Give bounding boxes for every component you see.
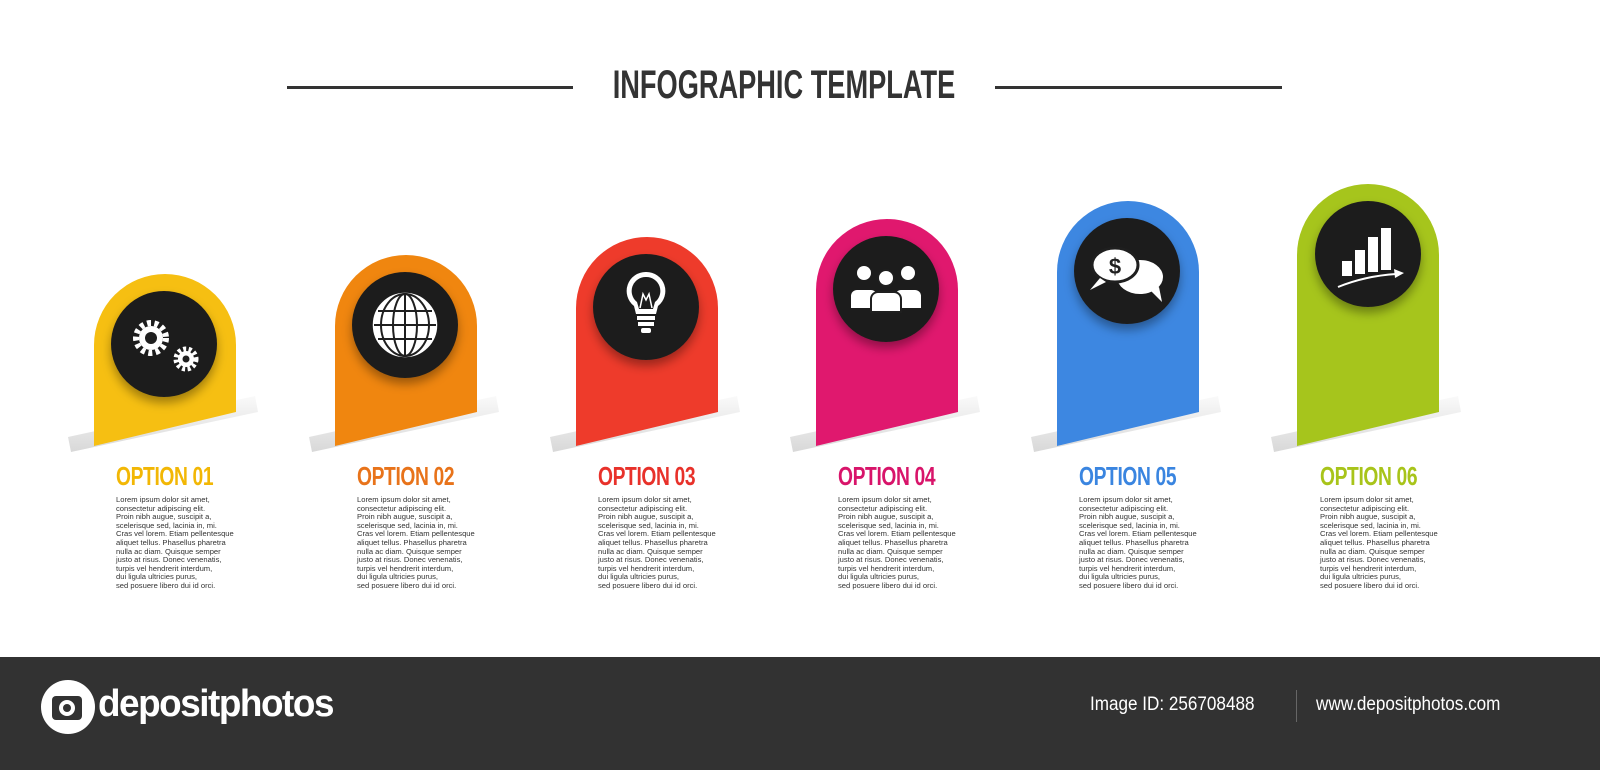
option 02 text: Cras vel lorem. Etiam pellentesque [357,529,475,538]
option 05 text: scelerisque sed, lacinia in, mi. [1079,521,1180,530]
option 05 text: Proin nibh augue, suscipit a, [1079,512,1174,521]
option 06 text: OPTION 06 [1320,461,1417,491]
option 04 text: sed posuere libero dui id orci. [838,581,937,590]
option 03 text: aliquet tellus. Phasellus pharetra [598,538,708,547]
option 03 text: sed posuere libero dui id orci. [598,581,697,590]
option 06 text: Cras vel lorem. Etiam pellentesque [1320,529,1438,538]
option 04 text [838,461,956,590]
option 03 text: scelerisque sed, lacinia in, mi. [598,521,699,530]
option 02 text: sed posuere libero dui id orci. [357,581,456,590]
option 01 text: Cras vel lorem. Etiam pellentesque [116,529,234,538]
option 05 text: OPTION 05 [1079,461,1176,491]
option 02 text: OPTION 02 [357,461,454,491]
option 03 text: Proin nibh augue, suscipit a, [598,512,693,521]
option 05 text: Lorem ipsum dolor sit amet, [1079,495,1173,504]
option 05 text: Cras vel lorem. Etiam pellentesque [1079,529,1197,538]
option 04 text: OPTION 04 [838,461,935,491]
option 06 text: sed posuere libero dui id orci. [1320,581,1419,590]
option 05 text [1078,461,1197,590]
footer logo [41,680,333,734]
option 06 text: Proin nibh augue, suscipit a, [1320,512,1415,521]
option 04 text: justo at risus. Donec venenatis, [838,555,944,564]
option 03 text [598,461,716,590]
option 03 text: turpis vel hendrerit interdum, [598,564,694,573]
option 02 text: turpis vel hendrerit interdum, [357,564,453,573]
option 06 text: turpis vel hendrerit interdum, [1320,564,1416,573]
option 01 text [116,461,234,590]
title: INFOGRAPHIC TEMPLATE [613,63,955,107]
option 06 text: consectetur adipiscing elit. [1320,504,1409,513]
option 03 text: OPTION 03 [598,461,695,491]
icon: people [851,266,921,312]
option 04 text: Lorem ipsum dolor sit amet, [838,495,932,504]
tab: option 03 [550,237,740,452]
footer url: www.depositphotos.com [1316,694,1500,715]
option 01 text: aliquet tellus. Phasellus pharetra [116,538,226,547]
option 05 text: sed posuere libero dui id orci. [1079,581,1178,590]
option 01 text: consectetur adipiscing elit. [116,504,205,513]
option 03 text: Lorem ipsum dolor sit amet, [598,495,692,504]
option 01 text: turpis vel hendrerit interdum, [116,564,212,573]
option 02 text: dui ligula ultricies purus, [357,572,438,581]
option 06 text: Lorem ipsum dolor sit amet, [1320,495,1414,504]
footer bar [0,657,1600,770]
option 01 text: OPTION 01 [116,461,213,491]
option 05 text: turpis vel hendrerit interdum, [1079,564,1175,573]
footer image id: Image ID: 256708488 [1090,694,1254,715]
option 05 text: nulla ac diam. Quisque semper [1079,547,1184,556]
icon: money chat: $ [1109,254,1121,279]
tab: option 02 [309,255,499,452]
option 01 text: dui ligula ultricies purus, [116,572,197,581]
option 02 text: nulla ac diam. Quisque semper [357,547,462,556]
option 02 text: Lorem ipsum dolor sit amet, [357,495,451,504]
tab: option 05 [1031,201,1221,452]
option 04 text: consectetur adipiscing elit. [838,504,927,513]
option 01 text: justo at risus. Donec venenatis, [116,555,222,564]
tab: option 04 [790,219,980,452]
option 05 text: consectetur adipiscing elit. [1079,504,1168,513]
option 01 text: scelerisque sed, lacinia in, mi. [116,521,217,530]
option 06 text: dui ligula ultricies purus, [1320,572,1401,581]
icon: gears [136,323,196,369]
option 02 text: aliquet tellus. Phasellus pharetra [357,538,467,547]
option 02 text [356,461,475,590]
option 05 text: dui ligula ultricies purus, [1079,572,1160,581]
option 02 text: justo at risus. Donec venenatis, [357,555,463,564]
option 06 text: justo at risus. Donec venenatis, [1320,555,1426,564]
option 04 text: Proin nibh augue, suscipit a, [838,512,933,521]
option 01 text: sed posuere libero dui id orci. [116,581,215,590]
icon: money chat [1090,248,1163,302]
option 03 text: consectetur adipiscing elit. [598,504,687,513]
option 02 text: Proin nibh augue, suscipit a, [357,512,452,521]
option 04 text: nulla ac diam. Quisque semper [838,547,943,556]
option 04 text: dui ligula ultricies purus, [838,572,919,581]
option 02 text: scelerisque sed, lacinia in, mi. [357,521,458,530]
option 05 text: justo at risus. Donec venenatis, [1079,555,1185,564]
option 06 text: nulla ac diam. Quisque semper [1320,547,1425,556]
option 01 text: nulla ac diam. Quisque semper [116,547,221,556]
tab: option 01 [68,274,258,452]
option 04 text: scelerisque sed, lacinia in, mi. [838,521,939,530]
option 01 text: Proin nibh augue, suscipit a, [116,512,211,521]
option 06 text [1320,461,1438,590]
option 05 text: aliquet tellus. Phasellus pharetra [1079,538,1189,547]
option 06 text: scelerisque sed, lacinia in, mi. [1320,521,1421,530]
icon: light bulb [627,272,665,333]
option 02 text: consectetur adipiscing elit. [357,504,446,513]
option 03 text: dui ligula ultricies purus, [598,572,679,581]
option 03 text: justo at risus. Donec venenatis, [598,555,704,564]
icon: growth chart [1338,228,1404,287]
option 04 text: Cras vel lorem. Etiam pellentesque [838,529,956,538]
option 03 text: nulla ac diam. Quisque semper [598,547,703,556]
option 03 text: Cras vel lorem. Etiam pellentesque [598,529,716,538]
option 04 text: aliquet tellus. Phasellus pharetra [838,538,948,547]
option 01 text: Lorem ipsum dolor sit amet, [116,495,210,504]
tab: option 06 [1271,184,1461,452]
option 06 text: aliquet tellus. Phasellus pharetra [1320,538,1430,547]
footer logo: depositphotos [98,683,333,725]
option 04 text: turpis vel hendrerit interdum, [838,564,934,573]
icon: globe [374,294,436,356]
